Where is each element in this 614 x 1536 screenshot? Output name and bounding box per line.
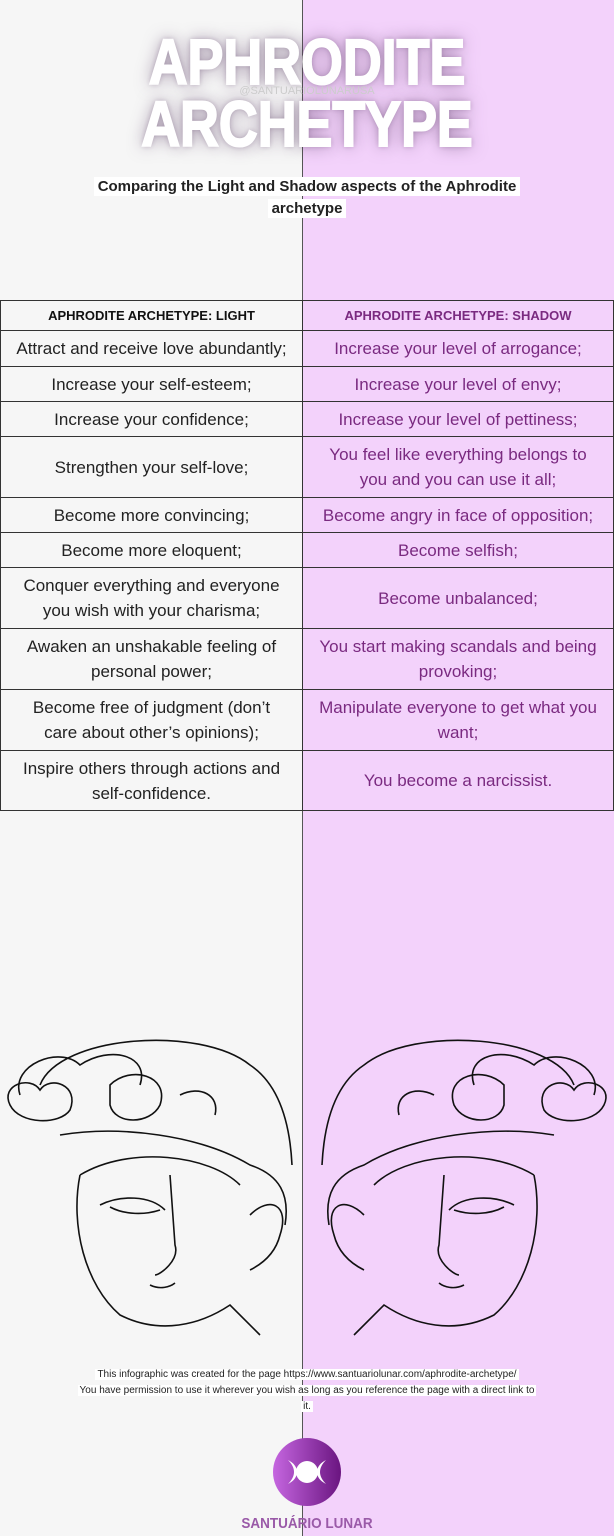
subtitle: archetype — [272, 200, 342, 217]
icon: left head — [8, 1040, 292, 1335]
comparison table: Become angry in face of opposition; — [323, 506, 593, 524]
comparison table: Become more eloquent; — [61, 540, 242, 560]
footer note: This infographic was created for the page https://www.santuariolunar.com/aphrodite-archetype/ — [97, 1369, 517, 1380]
icon: right head — [322, 1040, 606, 1335]
comparison table: Increase your level of arrogance; — [334, 339, 582, 358]
comparison table: Conquer everything and everyone you wish with your charisma; — [23, 576, 280, 620]
subtitle — [94, 177, 520, 218]
comparison table: Strengthen your self-love; — [55, 458, 248, 476]
logo — [241, 1438, 373, 1532]
comparison table: Become selfish; — [398, 540, 518, 560]
comparison table: Become more convincing; — [54, 506, 249, 524]
comparison table: Attract and receive love abundantly; — [16, 339, 287, 358]
comparison table: Become free of judgment (don’t care about other’s opinions); — [33, 698, 270, 742]
footer note: You have permission to use it wherever you wish as long as you reference the page with a direct link to — [80, 1385, 534, 1396]
comparison table: You feel like everything belongs to you and you can use it all; — [329, 445, 587, 489]
comparison table: Inspire others through actions and self-confidence. — [23, 758, 280, 802]
comparison table: Awaken an unshakable feeling of personal power; — [27, 637, 276, 681]
title — [135, 26, 476, 160]
comparison table: Increase your level of pettiness; — [338, 410, 578, 428]
title: ARCHETYPE — [141, 88, 473, 160]
footer note — [78, 1369, 536, 1412]
comparison table: You become a narcissist. — [364, 771, 552, 790]
comparison table: APHRODITE ARCHETYPE: SHADOW — [344, 308, 572, 323]
comparison table: Increase your confidence; — [54, 410, 249, 428]
illustration: two heads — [7, 1040, 607, 1336]
title: APHRODITE — [149, 26, 465, 98]
comparison table: APHRODITE ARCHETYPE: LIGHT — [48, 308, 255, 323]
comparison table: Increase your level of envy; — [355, 374, 561, 394]
comparison table — [0, 300, 614, 811]
logo text: SANTUÁRIO LUNAR — [241, 1515, 373, 1532]
subtitle: Comparing the Light and Shadow aspects of the Aphrodite — [98, 178, 516, 195]
comparison table: You start making scandals and being provoking; — [319, 637, 597, 681]
watermark: @SANTUARIOLUNARUSA — [239, 85, 375, 97]
comparison table: Manipulate everyone to get what you want; — [319, 698, 597, 742]
footer note: it. — [303, 1401, 311, 1412]
comparison table: Increase your self-esteem; — [51, 374, 252, 394]
comparison table: Become unbalanced; — [378, 588, 538, 608]
